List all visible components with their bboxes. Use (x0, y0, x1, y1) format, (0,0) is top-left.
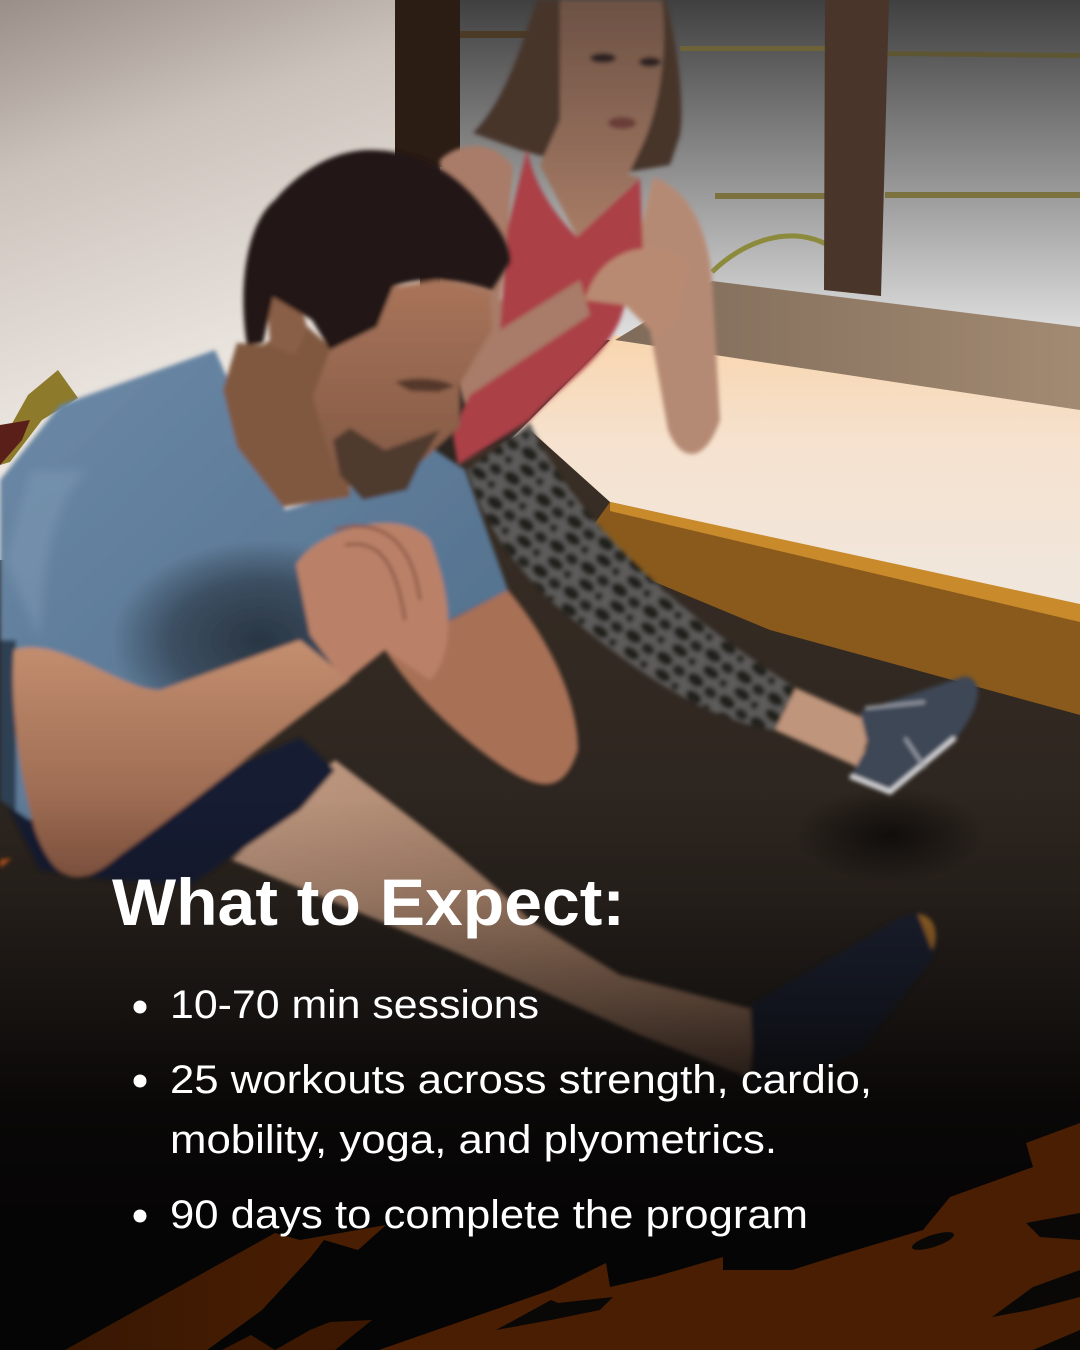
upper arm right (385, 590, 578, 784)
woman (440, 0, 978, 795)
oval (910, 1228, 956, 1254)
equipment left (0, 370, 78, 465)
far leg (232, 760, 755, 1078)
left strip (65, 1225, 386, 1350)
small strip (222, 1320, 372, 1350)
beard (333, 428, 440, 500)
floor (0, 430, 1080, 1350)
red top (452, 150, 643, 465)
hair (473, 0, 681, 175)
wall left (0, 0, 420, 560)
face (313, 280, 492, 500)
hands (585, 248, 688, 335)
baseboard (590, 502, 1080, 715)
ledge (615, 281, 1080, 410)
lips (608, 117, 636, 129)
face and neck (540, 0, 664, 237)
shoulders and arms (440, 146, 620, 405)
bullet list (134, 983, 872, 1237)
main strip (379, 1123, 1080, 1350)
hands (296, 523, 448, 682)
bullet 1: 10-70 min sessions (170, 983, 539, 1027)
bullet 3: 90 days to complete the program (170, 1193, 808, 1237)
shirt (0, 340, 520, 830)
shoe far (750, 914, 936, 1095)
neck (223, 320, 350, 507)
man (0, 150, 936, 1095)
bottom darkening overlay (0, 800, 1080, 1350)
ear (267, 297, 307, 355)
black splinter (496, 1297, 613, 1330)
shorts (0, 738, 335, 885)
forearm left (13, 640, 350, 877)
hair (243, 150, 510, 350)
eyes (590, 53, 661, 67)
floor shadow (795, 787, 985, 883)
orange brush stroke (65, 1123, 1080, 1350)
window (395, 0, 1080, 340)
glowing wall (500, 335, 1080, 606)
bullet 2: 25 workouts across strength, cardio, (170, 1058, 872, 1102)
title: What to Expect: (112, 865, 625, 939)
shoe (850, 676, 978, 795)
calf (775, 688, 872, 768)
right streaks (1026, 1213, 1080, 1240)
bullet 2: mobility, yoga, and plyometrics. (170, 1118, 777, 1162)
bullet 2 (134, 1058, 872, 1162)
leopard leggings (468, 423, 796, 730)
eye (395, 379, 455, 392)
